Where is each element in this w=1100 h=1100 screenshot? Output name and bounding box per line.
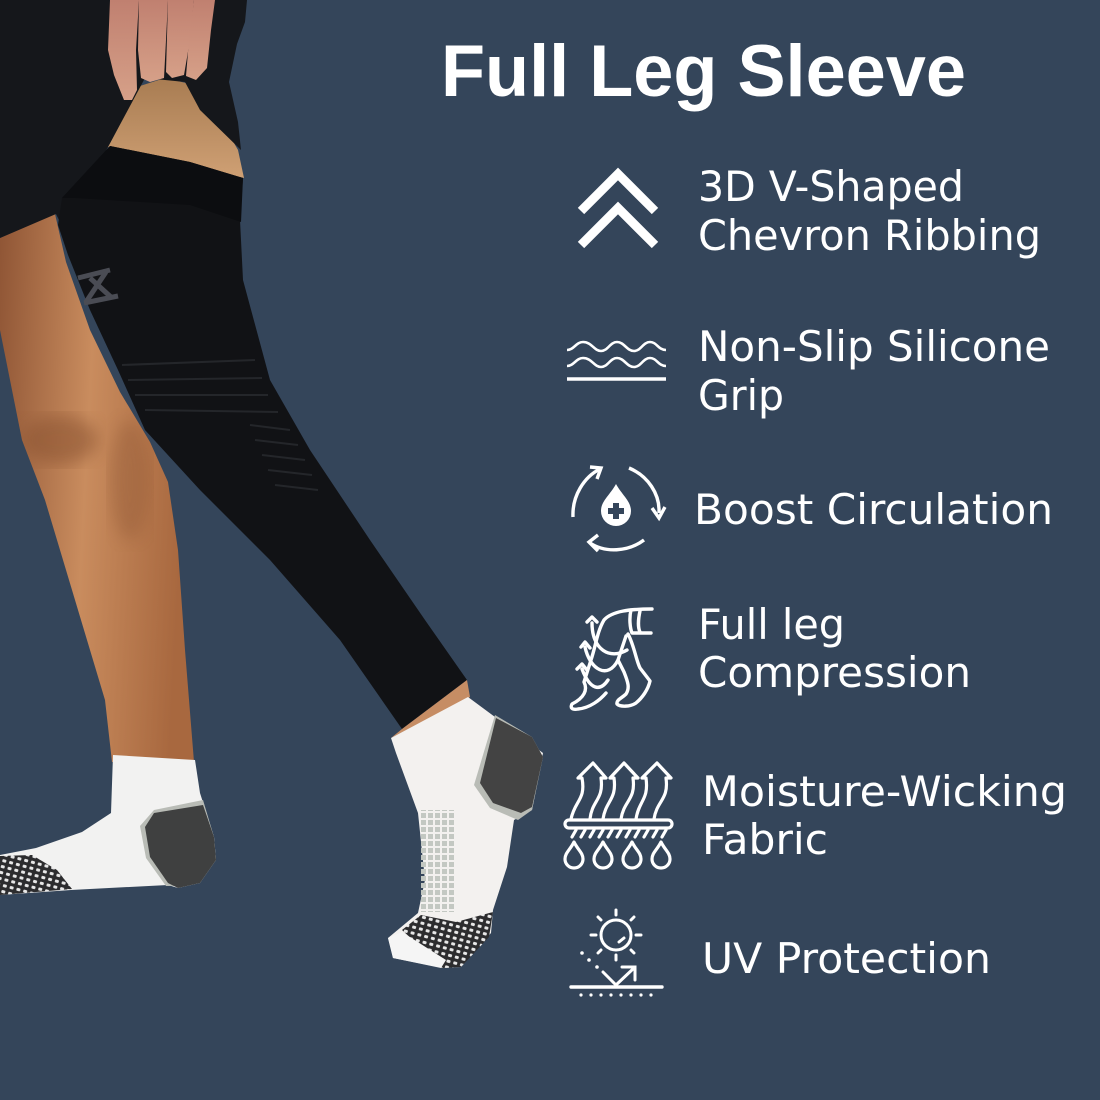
- sleeve band: [62, 146, 243, 222]
- left sock: [0, 755, 216, 895]
- text: Full leg Compression: [698, 600, 971, 697]
- right sock: [388, 697, 543, 968]
- text: Non-Slip Silicone Grip: [698, 322, 1050, 420]
- icon: waves: [567, 342, 666, 379]
- text: Full leg Compression: Compression: [698, 648, 971, 697]
- text: Non-Slip Silicone Grip: Grip: [698, 371, 784, 420]
- left leg skin: [0, 214, 194, 762]
- shorts: [0, 0, 247, 238]
- ankle skin: [391, 680, 470, 738]
- text: Moisture-Wicking Fabric: [702, 767, 1067, 864]
- text: Non-Slip Silicone Grip: Non-Slip Silicone: [698, 322, 1050, 371]
- black leg sleeve: [58, 146, 467, 729]
- text: 3D V-Shaped Chevron Ribbing: Chevron Ribbing: [698, 211, 1041, 260]
- text: Moisture-Wicking Fabric: Fabric: [702, 815, 828, 864]
- text: Full leg Compression: Full leg: [698, 600, 845, 649]
- left heel: [145, 805, 216, 888]
- text: UV Protection: UV Protection: [702, 934, 991, 983]
- right toe tip: [388, 932, 446, 968]
- text: Moisture-Wicking Fabric: Moisture-Wicking: [702, 767, 1067, 816]
- right toe: [402, 912, 493, 968]
- icon: chevrons: [581, 174, 655, 245]
- sleeve logo: [78, 270, 118, 303]
- thigh skin above sleeve: [108, 78, 244, 178]
- icon: UV protection: [571, 910, 662, 997]
- right heel: [480, 718, 543, 813]
- right sock grid: [420, 810, 456, 912]
- icon: circulation drop: [573, 467, 665, 551]
- icon: moisture wicking: [565, 763, 672, 868]
- right sock grey trim: [474, 715, 543, 820]
- left sock grey trim: [140, 800, 216, 886]
- text: 3D V-Shaped Chevron Ribbing: 3D V-Shaped: [698, 162, 964, 211]
- text: 3D V-Shaped Chevron Ribbing: [698, 162, 1041, 260]
- hand fingers: [108, 0, 215, 100]
- photo: runner's legs wearing black full leg sleeve and white socks: [0, 0, 543, 968]
- knee shading: [22, 416, 150, 540]
- title: Full Leg Sleeve: [441, 31, 966, 112]
- left toe: [0, 855, 72, 895]
- icon: legs with compression arrows: [571, 609, 652, 709]
- sleeve knee ribbing: [122, 360, 318, 490]
- text: Boost Circulation: Boost Circulation: [694, 485, 1053, 534]
